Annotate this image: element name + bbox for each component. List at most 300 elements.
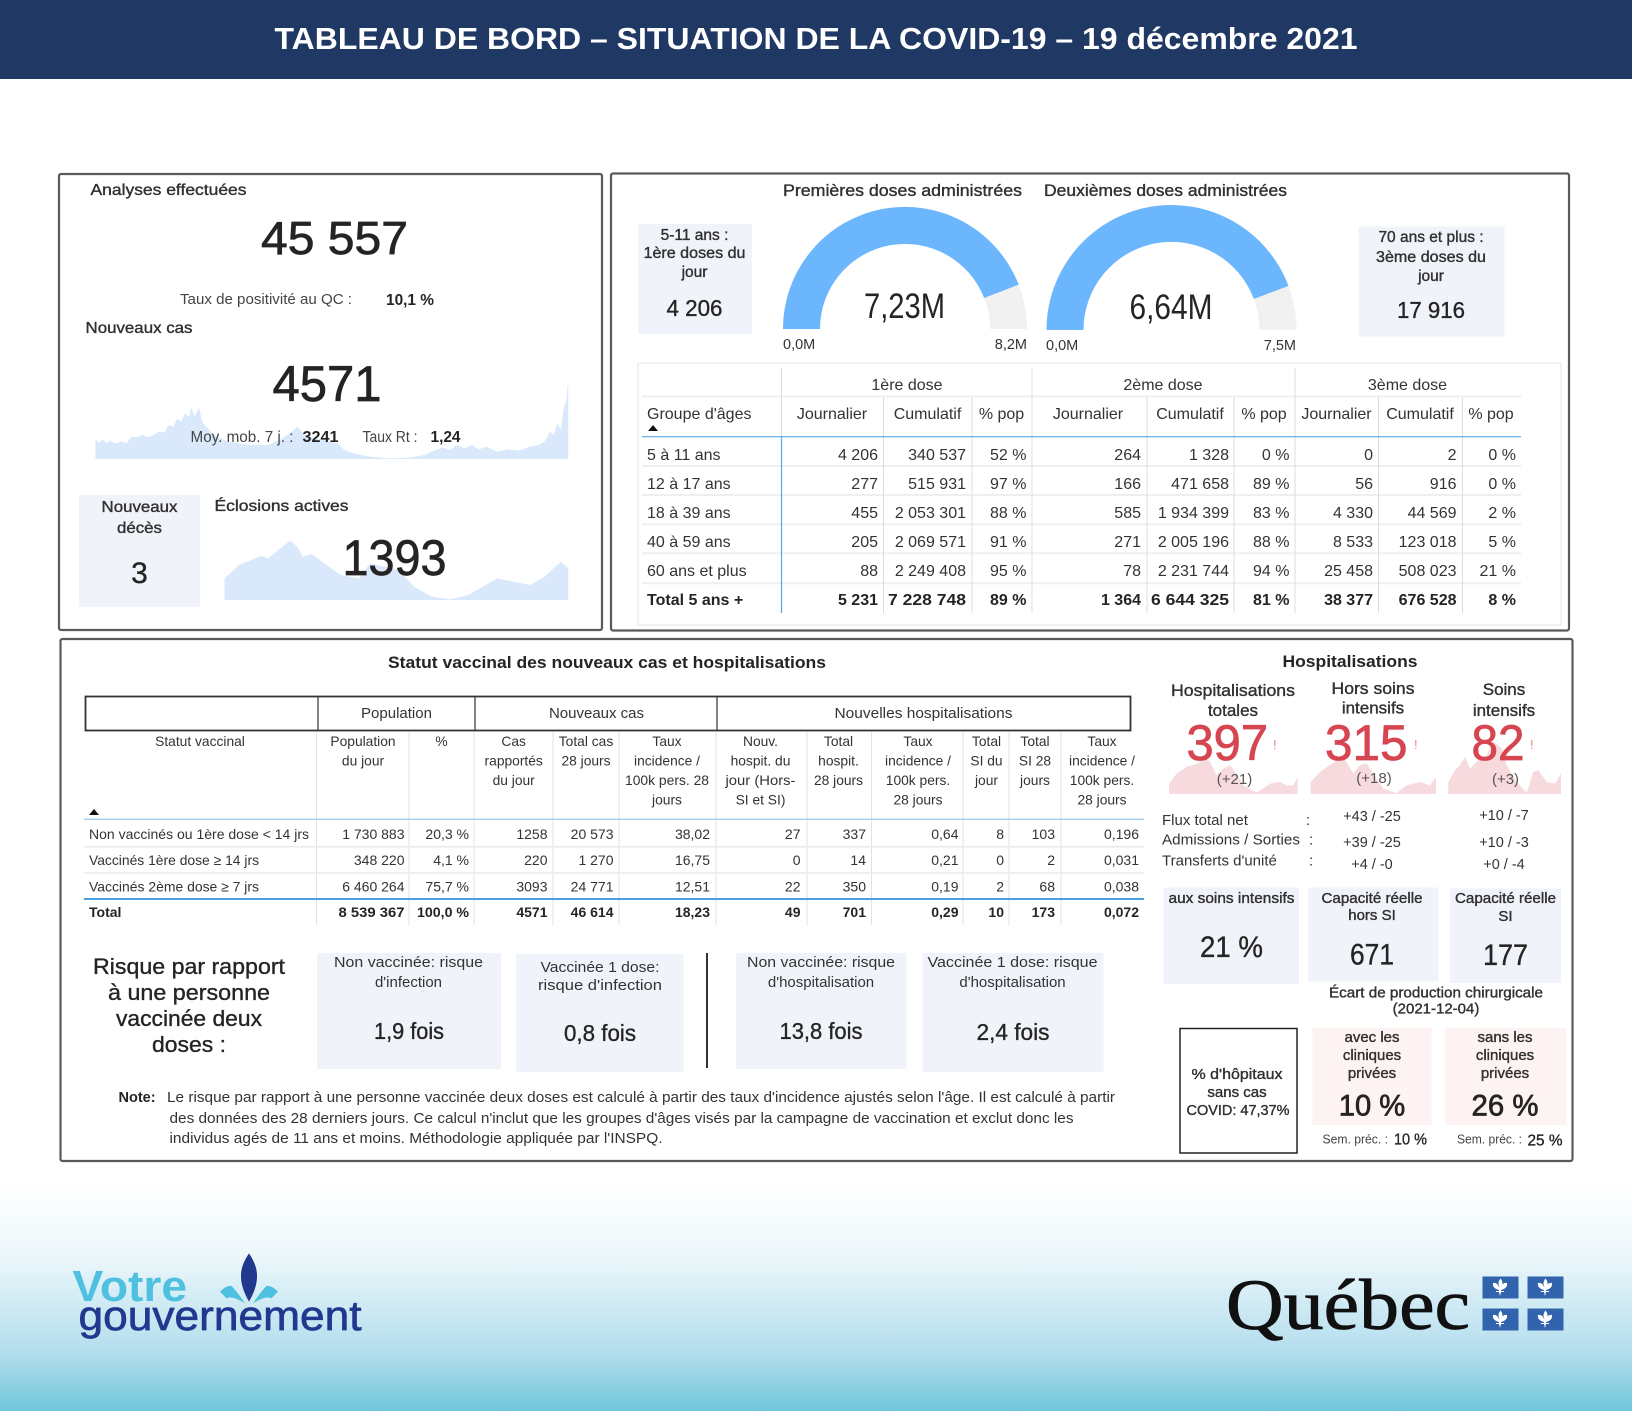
card: one dose infection risk — [516, 954, 684, 1072]
card: non vaccinated hospitalisation risk: Non vaccinée: risque — [747, 954, 895, 971]
row: total: 0,29 — [931, 904, 959, 920]
card: hospitals without covid — [1180, 1028, 1297, 1153]
label: Rt rate: Taux Rt : — [362, 429, 418, 446]
title banner — [0, 0, 1632, 79]
flows table: +39 / -25 — [1343, 835, 1401, 851]
gauge: first doses: 0,0M — [783, 337, 815, 353]
row: 12 à 17 ans: 471 658 — [1171, 476, 1229, 493]
heading: first doses: Premières doses administrées — [783, 182, 1022, 200]
gauge: first doses: 7,23M — [864, 287, 945, 326]
table column headers: du jour — [342, 754, 384, 769]
chart: outside intensive care: intensifs — [1342, 698, 1404, 718]
table header: 1ère dose — [871, 377, 943, 394]
card: non vaccinated infection risk: d'infection — [375, 974, 442, 991]
row: non vaccinés: 20,3 % — [425, 826, 469, 842]
row: 60 ans et plus: 78 — [1123, 563, 1141, 580]
row: 18 à 39 ans: 2 % — [1488, 505, 1516, 522]
row: vaccinés 1ère dose: 0 — [996, 852, 1004, 868]
row: 40 à 59 ans: 2 005 196 — [1158, 534, 1229, 551]
card: non vaccinated infection risk — [317, 953, 501, 1069]
table group header: Nouvelles hospitalisations — [834, 705, 1012, 722]
row: 12 à 17 ans: 97 % — [990, 476, 1026, 493]
card: one dose hospitalisation risk: 2,4 fois — [976, 1019, 1050, 1045]
card: capacity IC: 177 — [1483, 939, 1528, 972]
row: non vaccinés: 0,196 — [1104, 826, 1139, 842]
card: hospitals without covid: COVID: 47,37% — [1186, 1102, 1290, 1119]
card: 70+ third doses: 17 916 — [1397, 297, 1465, 323]
row: 18 à 39 ans: 4 330 — [1333, 505, 1373, 522]
table column headers: jour — [974, 773, 998, 788]
card: new deaths — [79, 495, 200, 607]
card: with private clinics: cliniques — [1343, 1047, 1401, 1064]
table column headers: 100k pers. — [886, 773, 950, 788]
table column headers: hospit. — [818, 754, 859, 769]
text block: note: Note: — [118, 1090, 156, 1106]
row: 40 à 59 ans: 2 069 571 — [895, 534, 966, 551]
table column headers: jours — [1019, 773, 1050, 788]
heading: vaccination status: Statut vaccinal des nouveaux cas et hospitalisations — [388, 653, 826, 672]
row: 12 à 17 ans: 515 931 — [908, 476, 966, 493]
row: total: 100,0 % — [417, 904, 470, 920]
row: 12 à 17 ans: 89 % — [1253, 476, 1290, 493]
table header: 3ème dose — [1368, 377, 1447, 394]
table header: Cumulatif — [894, 406, 962, 423]
row: total: 10 — [988, 904, 1004, 920]
heading: surgical gap: (2021-12-04) — [1393, 1000, 1479, 1018]
chart: intensive care: 82 — [1472, 715, 1524, 771]
row: vaccinés 1ère dose: 16,75 — [675, 852, 710, 868]
heading: risk — [93, 954, 285, 1057]
table group header — [86, 696, 1130, 730]
heading: risk: vaccinée deux — [116, 1006, 262, 1031]
table column headers: % — [435, 734, 448, 749]
row: total: 4571 — [516, 904, 548, 920]
row: total: 676 528 — [1399, 592, 1457, 609]
chart: intensive care — [1448, 680, 1561, 794]
row: 40 à 59 ans: 88 % — [1253, 534, 1290, 551]
row: 60 ans et plus: 2 231 744 — [1158, 563, 1229, 580]
table header: Groupe d'âges — [647, 406, 751, 423]
card: non vaccinated hospitalisation risk: d'hospitalisation — [768, 974, 874, 991]
card: one dose hospitalisation risk: Vaccinée 1 dose: risque — [928, 954, 1098, 971]
row: vaccinés 2ème dose: 6 460 264 — [342, 879, 405, 895]
card: non vaccinated hospitalisation risk — [736, 953, 906, 1069]
row: vaccinés 2ème dose: 0,19 — [931, 879, 959, 895]
number: analyses: 45 557 — [261, 212, 408, 264]
table header: Cumulatif — [1156, 406, 1224, 423]
chart: total hospitalisations: totales — [1208, 701, 1258, 720]
flows table: +10 / -7 — [1479, 808, 1529, 824]
row: vaccinés 2ème dose: 12,51 — [675, 879, 710, 895]
row: total — [647, 592, 1516, 609]
table group header: Nouveaux cas — [549, 705, 644, 722]
row: non vaccinés: 103 — [1032, 826, 1055, 842]
gauge: second doses: 6,64M — [1130, 288, 1212, 327]
row: non vaccinés — [89, 826, 1139, 842]
row: total: 8 % — [1488, 592, 1516, 609]
row: total: 38 377 — [1324, 592, 1373, 609]
row: 60 ans et plus: 25 458 — [1324, 563, 1373, 580]
table header: Journalier — [1301, 406, 1372, 423]
table column headers: Statut vaccinal — [155, 734, 245, 749]
row: vaccinés 2ème dose: 68 — [1039, 879, 1055, 895]
logo: Votre gouvernement: Votre — [72, 1262, 187, 1311]
flows table: Admissions / Sorties — [1162, 832, 1300, 848]
row: 12 à 17 ans: 0 % — [1488, 476, 1516, 493]
row: vaccinés 2ème dose: 22 — [785, 879, 801, 895]
flows table: Flux total net — [1162, 812, 1249, 829]
row: vaccinés 1ère dose: 1 270 — [578, 852, 614, 868]
table header: % pop — [1241, 406, 1287, 423]
row: vaccinés 1ère dose: 2 — [1047, 852, 1055, 868]
chart: outside intensive care: (+18) — [1356, 770, 1392, 787]
table column headers: Total cas — [559, 734, 613, 749]
flows table: +43 / -25 — [1343, 809, 1401, 825]
row: total: 0,072 — [1104, 904, 1139, 920]
table column headers: Cas — [501, 734, 526, 749]
card: capacity outside IC: Capacité réelle — [1322, 890, 1422, 907]
row: 18 à 39 ans: 585 — [1114, 505, 1141, 522]
number: new cases: 4571 — [272, 356, 382, 412]
row: 18 à 39 ans: 455 — [851, 505, 878, 522]
row: total — [89, 904, 1139, 920]
card: capacity outside IC — [1308, 888, 1438, 982]
table column headers: hospit. du — [731, 754, 790, 769]
row: 60 ans et plus: 508 023 — [1399, 563, 1457, 580]
table column headers: 28 jours — [893, 792, 943, 807]
table header: Journalier — [1053, 406, 1124, 423]
icon: stylised fleur-de-lis — [220, 1253, 278, 1303]
panel: vaccination status and hospitalisations — [60, 639, 1572, 1161]
row: vaccinés 2ème dose — [89, 879, 1139, 895]
previous week values: Sem. préc. : — [1322, 1132, 1388, 1146]
row: 18 à 39 ans: 83 % — [1253, 505, 1290, 522]
row: 40 à 59 ans: 271 — [1114, 534, 1141, 551]
chart: intensive care: intensifs — [1473, 701, 1535, 720]
row: non vaccinés: 8 — [996, 826, 1004, 842]
chart: total hospitalisations: (+21) — [1217, 771, 1252, 788]
table column headers — [89, 734, 1135, 815]
table column headers: jours — [651, 792, 682, 807]
table column headers: Taux — [652, 734, 682, 749]
row: non vaccinés: Non vaccinés ou 1ère dose < 14 jrs — [89, 826, 309, 842]
row: vaccinés 1ère dose: Vaccinés 1ère dose ≥ 14 jrs — [89, 852, 259, 868]
heading: surgical gap: Écart de production chirurgicale — [1329, 984, 1543, 1002]
row: 18 à 39 ans: 18 à 39 ans — [647, 505, 731, 522]
table column headers: incidence / — [1069, 754, 1135, 769]
row: 5 à 11 ans: 0 % — [1488, 447, 1516, 464]
table column headers: 28 jours — [1077, 792, 1127, 807]
row: non vaccinés: 1 730 883 — [342, 826, 405, 842]
card: non vaccinated hospitalisation risk: 13,8 fois — [780, 1018, 862, 1044]
row: vaccinés 1ère dose: 4,1 % — [433, 852, 469, 868]
row: 18 à 39 ans — [647, 505, 1516, 522]
chart: intensive care: (+3) — [1492, 771, 1519, 788]
row: non vaccinés: 0,64 — [931, 826, 959, 842]
heading: analyses: Analyses effectuées — [90, 182, 246, 199]
card: with private clinics: privées — [1348, 1065, 1396, 1082]
row: 18 à 39 ans: 1 934 399 — [1158, 505, 1229, 522]
card: with private clinics — [1312, 1028, 1432, 1125]
row: total: 7 228 748 — [888, 592, 966, 609]
heading: risk: doses : — [152, 1032, 226, 1057]
row: 12 à 17 ans: 166 — [1114, 476, 1141, 493]
row: 40 à 59 ans: 5 % — [1488, 534, 1516, 551]
row: 40 à 59 ans: 205 — [851, 534, 878, 551]
flows table: : — [1309, 852, 1313, 870]
table column headers: SI 28 — [1019, 754, 1051, 769]
row: 5 à 11 ans: 0 % — [1262, 447, 1290, 464]
logo: Québec: Québec — [1226, 1265, 1470, 1345]
row: 60 ans et plus — [647, 563, 1516, 580]
row: total: Total — [89, 904, 121, 920]
card: one dose infection risk: Vaccinée 1 dose: — [540, 959, 660, 976]
row: 18 à 39 ans: 88 % — [990, 505, 1026, 522]
gauge: first doses — [783, 207, 1027, 353]
chart: outside intensive care: ! — [1414, 737, 1418, 752]
table column headers: incidence / — [634, 754, 700, 769]
card: hospitals without covid: % d'hôpitaux — [1192, 1066, 1283, 1083]
icon: Quebec flag — [1482, 1276, 1564, 1330]
table column headers: Total — [972, 734, 1001, 749]
row: 18 à 39 ans: 44 569 — [1408, 505, 1457, 522]
card: in intensive care: 21 % — [1200, 931, 1263, 964]
row: 40 à 59 ans: 91 % — [990, 534, 1026, 551]
row: non vaccinés: 20 573 — [571, 826, 614, 842]
card: capacity outside IC: hors SI — [1348, 907, 1396, 924]
row: vaccinés 1ère dose: 0,21 — [931, 852, 959, 868]
chart: outside intensive care: Hors soins — [1332, 679, 1414, 698]
previous week values: Sem. préc. : — [1457, 1132, 1522, 1146]
card: non vaccinated infection risk: Non vaccinée: risque — [334, 954, 483, 971]
row: 18 à 39 ans: 2 053 301 — [895, 505, 966, 522]
card: one dose hospitalisation risk: d'hospitalisation — [959, 974, 1066, 991]
row: vaccinés 1ère dose: 14 — [850, 852, 866, 868]
row: total: 1 364 — [1101, 592, 1141, 609]
row: 60 ans et plus: 94 % — [1253, 563, 1290, 580]
row: vaccinés 2ème dose: 2 — [996, 879, 1004, 895]
card: 5-11 first doses: jour — [681, 264, 707, 281]
card: in intensive care — [1164, 888, 1299, 984]
table header — [647, 377, 1514, 431]
previous week values: 25 % — [1528, 1132, 1562, 1150]
value: positivity rate: 10,1 % — [386, 292, 434, 309]
row: 12 à 17 ans: 916 — [1430, 476, 1457, 493]
heading: second doses: Deuxièmes doses administrées — [1044, 182, 1287, 200]
previous week values — [1322, 1132, 1562, 1150]
row: total: 5 231 — [838, 592, 878, 609]
chart: total hospitalisations: 397 — [1186, 715, 1268, 771]
panel: vaccination — [611, 174, 1569, 630]
chart: outside intensive care — [1311, 679, 1436, 794]
card: 70+ third doses — [1358, 226, 1504, 336]
flows table: : — [1309, 832, 1313, 848]
row: non vaccinés: 1258 — [516, 826, 548, 842]
row: 60 ans et plus: 95 % — [990, 563, 1026, 580]
row: 5 à 11 ans: 4 206 — [838, 447, 878, 464]
row: total: 18,23 — [675, 904, 710, 920]
row: total: 701 — [843, 904, 866, 920]
flows table: +4 / -0 — [1351, 857, 1393, 873]
row: total: 8 539 367 — [338, 904, 405, 920]
card: capacity IC: Capacité réelle — [1455, 890, 1556, 907]
value: moving average: 3241 — [302, 429, 339, 446]
table column headers: incidence / — [885, 754, 951, 769]
row: 5 à 11 ans: 52 % — [990, 447, 1026, 464]
table column headers: Population — [330, 734, 396, 749]
row: 40 à 59 ans: 123 018 — [1399, 534, 1457, 551]
row: non vaccinés: 38,02 — [675, 826, 710, 842]
label: moving average: Moy. mob. 7 j. : — [190, 429, 294, 446]
table: doses by age group — [638, 363, 1561, 625]
divider: risk cards — [706, 953, 708, 1068]
row: vaccinés 2ème dose: Vaccinés 2ème dose ≥ 7 jrs — [89, 879, 259, 895]
text block: note: des données des 28 derniers jours. Ce calcul n'inclut que les groupes d'âges visés par la campagne de vaccination et exclut donc les — [170, 1111, 1074, 1127]
chart: outside intensive care: 315 — [1325, 715, 1408, 771]
card: new deaths: Nouveaux — [102, 499, 178, 516]
table header: 2ème dose — [1123, 377, 1203, 394]
panel: analyses, cases, outbreaks — [59, 174, 602, 630]
table column headers: Taux — [903, 734, 933, 749]
card: 5-11 first doses: 4 206 — [666, 295, 722, 321]
card: one dose infection risk: 0,8 fois — [564, 1020, 636, 1046]
gauge: second doses — [1046, 205, 1296, 354]
row: vaccinés 1ère dose: 0,031 — [1104, 852, 1139, 868]
row: 60 ans et plus: 88 — [860, 563, 878, 580]
card: new deaths: 3 — [131, 557, 148, 590]
heading: hospitalisations: Hospitalisations — [1282, 652, 1418, 671]
table column headers: SI du — [970, 754, 1003, 769]
row: total: 89 % — [990, 592, 1026, 609]
row: vaccinés 1ère dose: 0 — [793, 852, 801, 868]
heading: surgical gap — [1329, 984, 1543, 1018]
card: 5-11 first doses — [638, 224, 752, 334]
logo: Québec — [1226, 1265, 1564, 1345]
table column headers: 28 jours — [561, 754, 611, 769]
row: 40 à 59 ans: 40 à 59 ans — [647, 534, 731, 551]
row: 60 ans et plus: 60 ans et plus — [647, 563, 747, 580]
row: vaccinés 2ème dose: 0,038 — [1104, 879, 1139, 895]
table column headers: Taux — [1087, 734, 1117, 749]
previous week values: 10 % — [1394, 1132, 1427, 1148]
table header: % pop — [979, 406, 1024, 423]
card: with private clinics: avec les — [1344, 1029, 1400, 1046]
row: 12 à 17 ans: 56 — [1355, 476, 1373, 493]
card: 5-11 first doses: 1ère doses du — [644, 245, 746, 262]
flows table: +10 / -3 — [1479, 835, 1529, 851]
table column headers: 28 jours — [814, 773, 863, 788]
table column headers: 100k pers. 28 — [625, 773, 709, 788]
row: 5 à 11 ans: 2 — [1448, 447, 1457, 464]
logo: Votre gouvernement — [72, 1253, 362, 1339]
flows table — [1162, 808, 1529, 873]
row: 40 à 59 ans: 8 533 — [1333, 534, 1373, 551]
row: 60 ans et plus: 2 249 408 — [895, 563, 966, 580]
text block: note: individus agés de 11 ans et moins. Méthodologie appliquée par l'INSPQ. — [170, 1131, 662, 1147]
row: 12 à 17 ans: 277 — [851, 476, 878, 493]
heading: new cases: Nouveaux cas — [86, 320, 192, 337]
card: without private clinics: privées — [1481, 1065, 1529, 1082]
gauge: second doses: 0,0M — [1046, 338, 1078, 354]
heading: risk: Risque par rapport — [93, 954, 285, 979]
card: capacity IC — [1450, 888, 1561, 983]
row: total: 49 — [785, 904, 801, 920]
card: non vaccinated infection risk: 1,9 fois — [374, 1018, 444, 1044]
table header: Journalier — [797, 406, 868, 423]
table group header: Population — [361, 705, 432, 722]
chart: new cases area — [95, 380, 568, 459]
row: 5 à 11 ans — [647, 447, 1516, 464]
heading: risk: à une personne — [108, 980, 270, 1005]
row: total: Total 5 ans + — [647, 592, 743, 609]
title: TABLEAU DE BORD – SITUATION DE LA COVID-19 – 19 décembre 2021 — [274, 21, 1358, 56]
row: vaccinés 2ème dose: 24 771 — [571, 879, 614, 895]
card: one dose hospitalisation risk — [922, 953, 1104, 1072]
card: with private clinics: 10 % — [1339, 1090, 1405, 1122]
logo: Votre gouvernement: gouvernement — [78, 1292, 362, 1339]
table column headers: jour (Hors- — [724, 773, 796, 788]
card: one dose infection risk: risque d'infection — [538, 977, 662, 994]
flows table: Transferts d'unité — [1162, 852, 1277, 870]
row: vaccinés 2ème dose: 3093 — [516, 879, 548, 895]
table header: Cumulatif — [1386, 406, 1454, 423]
card: 70+ third doses: 3ème doses du — [1376, 249, 1486, 266]
chart: intensive care: ! — [1530, 737, 1534, 752]
number: active outbreaks: 1393 — [342, 530, 446, 586]
table column headers: Total — [1020, 734, 1050, 749]
row: 12 à 17 ans — [647, 476, 1516, 493]
row: vaccinés 1ère dose: 220 — [524, 852, 548, 868]
row: vaccinés 1ère dose — [89, 852, 1139, 868]
row: 5 à 11 ans: 0 — [1364, 447, 1373, 464]
row: vaccinés 2ème dose: 350 — [843, 879, 866, 895]
table header: % pop — [1468, 406, 1514, 423]
flows table: +0 / -4 — [1483, 857, 1525, 873]
chart: total hospitalisations — [1169, 681, 1298, 794]
row: total: 173 — [1032, 904, 1055, 920]
card: 5-11 first doses: 5-11 ans : — [661, 227, 728, 244]
card: new deaths: décès — [117, 520, 162, 537]
row: 40 à 59 ans — [647, 534, 1516, 551]
row: total: 46 614 — [571, 904, 614, 920]
table column headers: Nouv. — [743, 734, 778, 749]
table: vaccination status — [84, 696, 1144, 925]
card: without private clinics: sans les — [1477, 1029, 1533, 1046]
row: non vaccinés: 337 — [843, 826, 866, 842]
table column headers: SI et SI) — [736, 792, 785, 807]
row: vaccinés 2ème dose: 75,7 % — [425, 879, 469, 895]
table column headers: Total — [824, 734, 853, 749]
footer gradient background — [0, 1185, 1632, 1411]
gauge: first doses: 8,2M — [995, 337, 1027, 353]
label: positivity rate: Taux de positivité au QC : — [180, 291, 352, 308]
row: non vaccinés: 27 — [785, 826, 801, 842]
row: 5 à 11 ans: 5 à 11 ans — [647, 447, 721, 464]
text block: note — [118, 1090, 1115, 1147]
table column headers: du jour — [493, 773, 535, 788]
card: capacity outside IC: 671 — [1350, 938, 1394, 972]
row: total: 6 644 325 — [1151, 592, 1229, 609]
row: 5 à 11 ans: 1 328 — [1189, 447, 1229, 464]
chart: intensive care: Soins — [1483, 680, 1525, 699]
flows table: : — [1306, 812, 1310, 829]
row: 60 ans et plus: 21 % — [1480, 563, 1516, 580]
chart: active outbreaks area — [225, 541, 568, 600]
table column headers: 100k pers. — [1070, 773, 1134, 788]
row: 12 à 17 ans: 12 à 17 ans — [647, 476, 731, 493]
card: hospitals without covid: sans cas — [1207, 1084, 1267, 1101]
chart: total hospitalisations: ! — [1273, 737, 1277, 752]
